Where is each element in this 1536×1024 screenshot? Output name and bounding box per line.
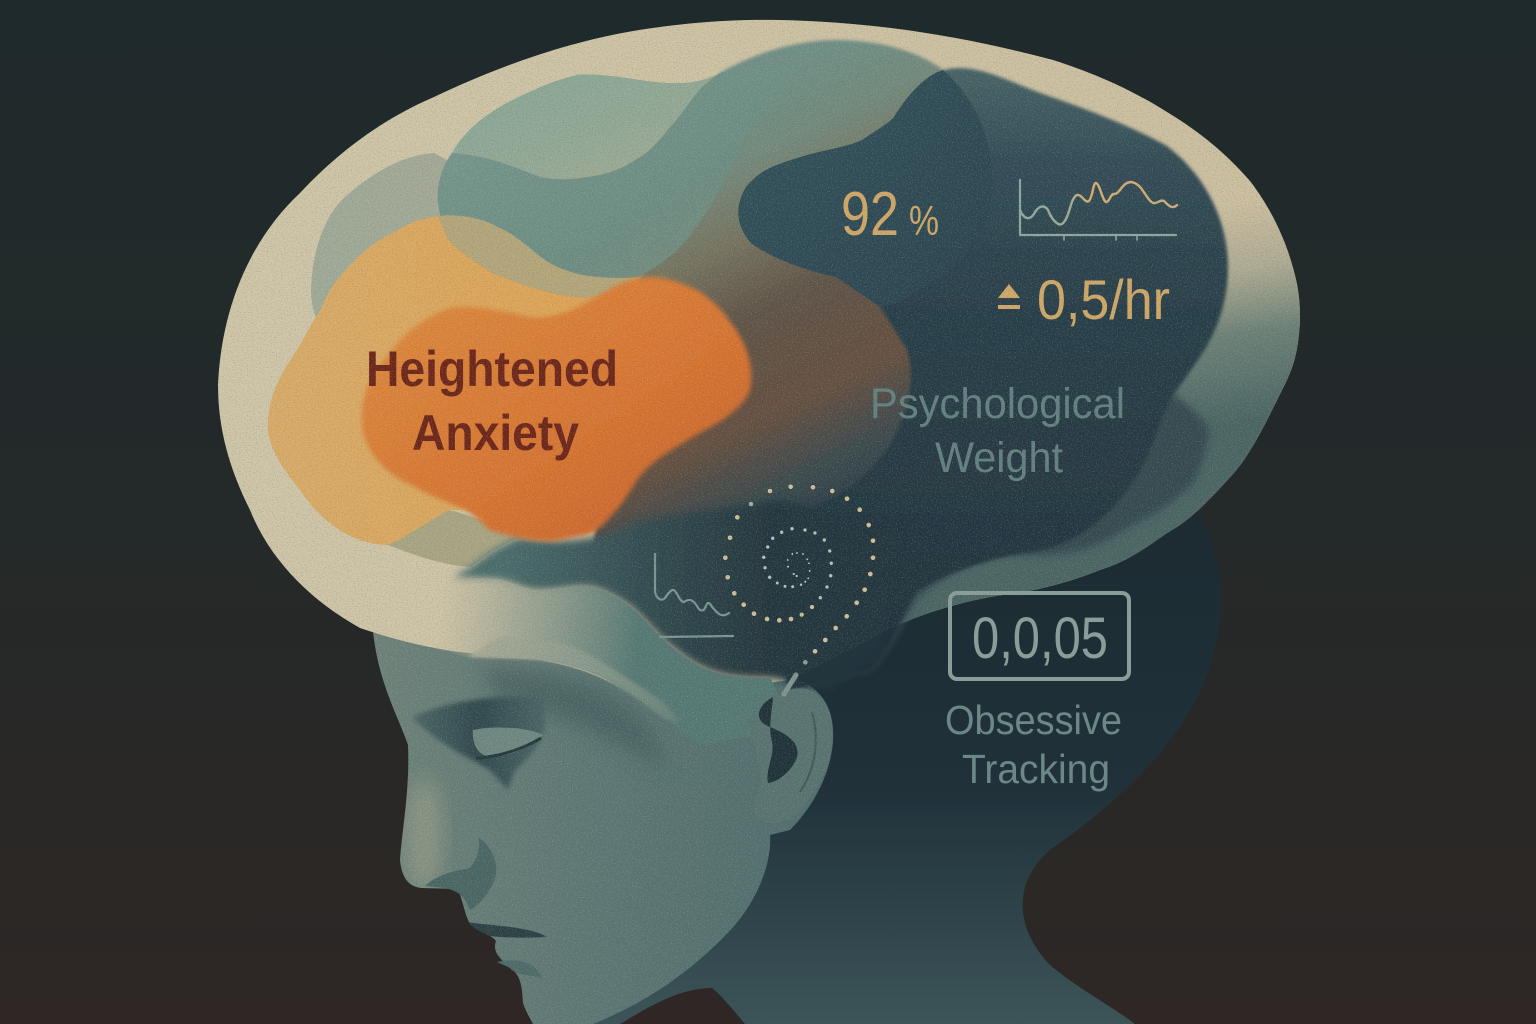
label: Obsessive Tracking bbox=[945, 697, 1122, 792]
digital counter box: 0,0,05 bbox=[972, 606, 1108, 671]
brown central area bbox=[590, 40, 943, 564]
label: Psychological Weight: Weight bbox=[935, 434, 1063, 482]
label: Obsessive Tracking: Obsessive bbox=[945, 697, 1122, 743]
title: Heightened Anxiety: Heightened bbox=[366, 341, 618, 397]
brain outer cream shell bbox=[218, 20, 1300, 700]
label: Obsessive Tracking: Tracking bbox=[962, 746, 1110, 792]
green and orange overlap bbox=[438, 215, 639, 297]
nostril bbox=[425, 837, 496, 910]
inner ear bbox=[759, 697, 798, 783]
closed eyelid bbox=[473, 727, 543, 757]
body shadow below the jaw bbox=[620, 988, 745, 1024]
nose highlight bbox=[404, 777, 444, 893]
face bbox=[372, 610, 833, 1024]
stat: rate per hour bbox=[998, 268, 1170, 331]
dark teal lower centre bbox=[453, 500, 900, 690]
outer orange blob bbox=[268, 215, 750, 545]
icon: up triangle bbox=[998, 284, 1020, 309]
small declining chart bbox=[655, 554, 733, 637]
mouth bbox=[468, 922, 547, 938]
darker teal blob behind the 92 percent bbox=[738, 70, 993, 307]
title: Heightened Anxiety bbox=[366, 341, 618, 461]
lower lip shadow bbox=[497, 960, 542, 978]
teal band across the temple bbox=[400, 560, 790, 745]
deeper green layer bbox=[438, 68, 791, 297]
spiral tail into the ear bbox=[784, 675, 796, 694]
inner orange blob bbox=[362, 277, 751, 541]
line chart bbox=[1020, 180, 1177, 240]
navy main blob bbox=[720, 68, 1228, 690]
title: Heightened Anxiety: Anxiety bbox=[412, 405, 579, 461]
label: Psychological Weight bbox=[870, 380, 1125, 482]
pale strand above the forehead bbox=[467, 637, 681, 722]
eye socket bbox=[412, 696, 546, 790]
teal fade on the right of the shell bbox=[899, 216, 1300, 624]
film grain bbox=[218, 20, 1300, 1024]
rate value: 0,5/hr bbox=[1037, 268, 1170, 331]
stat: 92 percent: 92 bbox=[841, 180, 899, 249]
ear rim fold bbox=[800, 712, 816, 792]
tan piece under the orange bbox=[388, 510, 521, 567]
hair and neck silhouette bbox=[560, 500, 1221, 1024]
stat: 92 percent: % bbox=[909, 197, 939, 244]
intermediate teal layer below the navy bbox=[790, 380, 1210, 690]
light green wave bbox=[452, 73, 720, 179]
ear bbox=[748, 688, 832, 823]
forehead shadow bbox=[480, 668, 665, 770]
digital counter box bbox=[950, 593, 1129, 679]
label: Psychological Weight: Psychological bbox=[870, 380, 1125, 428]
sage blob behind the orange bbox=[311, 153, 520, 325]
dotted spiral bbox=[723, 484, 876, 665]
eyelash line bbox=[476, 738, 541, 758]
